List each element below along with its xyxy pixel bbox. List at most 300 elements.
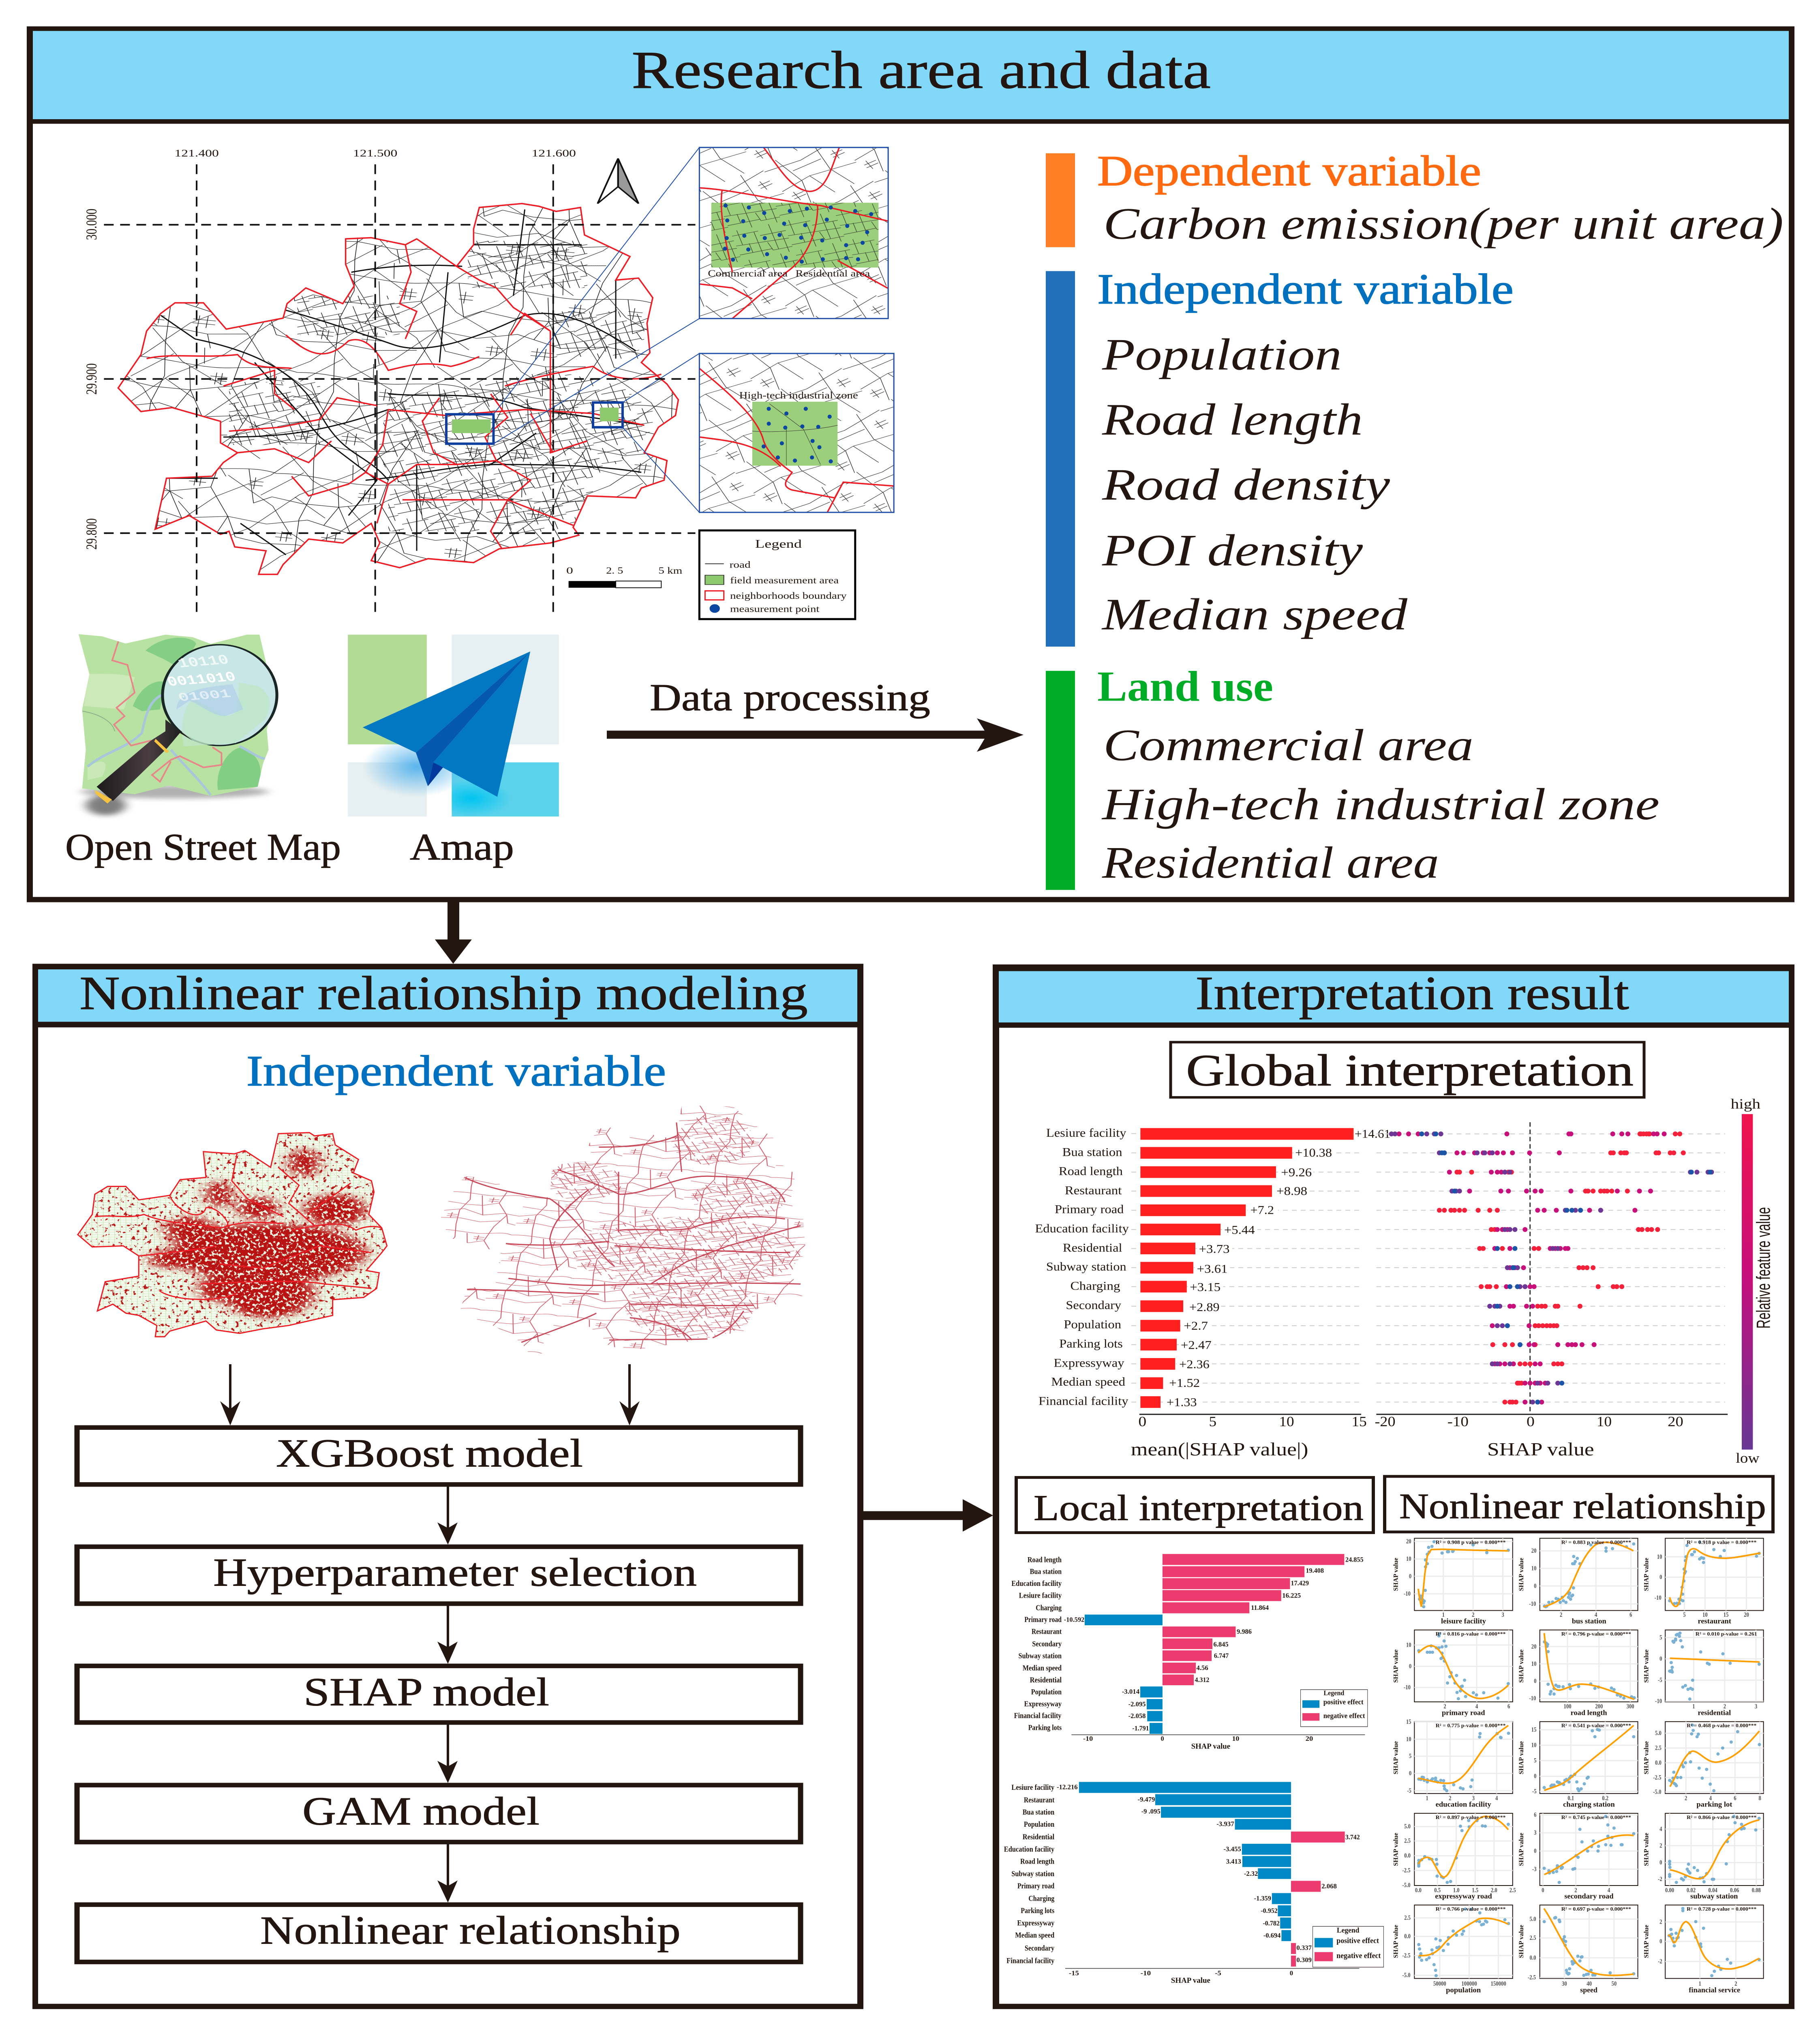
heading: modeling: Nonlinear relationship modeling: [79, 966, 808, 1020]
chart: population: -5.0: [1402, 1972, 1411, 1979]
header band: interpretation: [999, 971, 1789, 1022]
chart: road length: 100: [1563, 1703, 1572, 1710]
legend: effects sample one: negative effect: [1323, 1712, 1365, 1720]
chart: local interpretation sample two: Lesiure facility: [1011, 1783, 1055, 1791]
chart: local interpretation sample one: Secondary: [1032, 1640, 1062, 1648]
chart: financial service: R² = 0.728 p-value = 0.000***: [1687, 1907, 1757, 1912]
chart: local interpretation sample one: Primary road: [1024, 1616, 1062, 1624]
independent variable group: Population: [1102, 329, 1342, 379]
chart: mean SHAP value bars: Education facility: [1035, 1222, 1129, 1235]
chart: mean SHAP value bars: Parking lots: [1059, 1337, 1123, 1350]
chart: education facility: [1392, 1718, 1513, 1808]
arrow: left map to XGBoost: [220, 1364, 240, 1425]
chart: residential: -5: [1658, 1677, 1662, 1684]
chart: expressway road: 2.5: [1404, 1838, 1411, 1845]
chart: local interpretation sample one: 19.408: [1306, 1567, 1324, 1575]
independent variable group: [1046, 265, 1514, 647]
chart: leisure facility: 3: [1501, 1611, 1504, 1618]
small multiples: nonlinear relationship charts: [1392, 1538, 1764, 1994]
chart: local interpretation sample two: 0: [1290, 1969, 1293, 1977]
coordinate labels: 30.000: [84, 209, 100, 240]
chart: subway station: 0.04: [1708, 1887, 1717, 1894]
independent variable group: Road length: [1102, 394, 1363, 444]
chart: leisure facility: 0: [1409, 1573, 1411, 1580]
chart: primary road: 4: [1475, 1703, 1478, 1710]
chart: speed: 30: [1562, 1980, 1567, 1987]
chart: local interpretation sample two: 2.068: [1321, 1883, 1337, 1890]
colour bar legend: [1731, 1096, 1775, 1466]
arrow: data processing: [607, 718, 1023, 752]
chart: mean SHAP value bars: +9.26: [1281, 1166, 1312, 1179]
chart: parking lot: parking lot: [1696, 1800, 1732, 1808]
chart: local interpretation sample two: -5: [1215, 1969, 1221, 1977]
map legend: Legend: [755, 537, 802, 550]
chart: subway station: 4: [1659, 1826, 1662, 1833]
chart: SHAP value beeswarm: [1375, 1122, 1728, 1459]
chart: mean SHAP value bars: Charging: [1071, 1279, 1120, 1293]
title: Research area and data: [632, 40, 1211, 100]
chart: restaurant: 10: [1702, 1611, 1708, 1618]
chart: financial service: SHAP value: [1642, 1925, 1650, 1958]
icon: Open Street Map logo: 0011010: [165, 669, 238, 690]
chart: local interpretation sample one: -2.095: [1128, 1701, 1146, 1708]
chart: charging station: 5: [1534, 1757, 1536, 1764]
chart: financial service: 2: [1659, 1918, 1662, 1926]
chart: speed: 5.0: [1530, 1916, 1536, 1923]
arrow: research to modeling: [435, 902, 472, 964]
box: local interpretation: Local interpretation: [1034, 1488, 1364, 1528]
chart: primary road: 2: [1443, 1703, 1446, 1710]
chart: local interpretation sample one: Bua station: [1030, 1567, 1062, 1576]
chart: road length: -10: [1529, 1695, 1536, 1702]
chart: secondary road: 0: [1534, 1847, 1536, 1855]
chart: local interpretation sample two: Road length: [1020, 1857, 1055, 1866]
chart: residential: 0: [1659, 1655, 1662, 1663]
chart: population: 50000: [1433, 1980, 1446, 1987]
chart: mean SHAP value bars: Median speed: [1051, 1376, 1125, 1388]
chart: mean SHAP value bars: +2.36: [1179, 1358, 1210, 1371]
box: GAM model: GAM model: [302, 1789, 540, 1834]
chart: mean SHAP value bars: +3.61: [1197, 1262, 1228, 1275]
chart: local interpretation sample one: Charging: [1036, 1603, 1062, 1612]
chart: road length: R² = 0.796 p-value = 0.000***: [1561, 1632, 1631, 1637]
chart: residential: SHAP value: [1642, 1650, 1650, 1683]
chart: restaurant: 15: [1724, 1611, 1728, 1618]
chart: charging station: charging station: [1563, 1800, 1615, 1808]
variable list: [1046, 147, 1784, 890]
scale bar: 5 km: [658, 566, 683, 576]
inset: commercial and residential measurement area: [699, 148, 889, 319]
road network: [109, 198, 690, 578]
land use group: Commercial area: [1103, 720, 1473, 770]
arrow: modeling to interpretation: [863, 1499, 993, 1532]
chart: local interpretation sample two: Education facility: [1004, 1845, 1055, 1853]
chart: speed: SHAP value: [1518, 1925, 1525, 1958]
chart: local interpretation sample two: -0.694: [1263, 1932, 1281, 1939]
panel: research area and data: [27, 26, 1794, 902]
chart: mean SHAP value bars: +3.15: [1190, 1281, 1220, 1294]
chart: speed: 50: [1611, 1980, 1617, 1987]
chart: mean SHAP value bars: +1.33: [1167, 1396, 1197, 1409]
chart: financial service: [1642, 1905, 1764, 1994]
scale bar: 0: [566, 566, 573, 576]
chart: leisure facility: R² = 0.908 p value = 0.000***: [1436, 1540, 1506, 1545]
icon: Amap logo: [348, 634, 559, 817]
chart: mean SHAP value bars: 15: [1351, 1414, 1367, 1429]
chart: parking lot: 5.0: [1655, 1730, 1662, 1737]
chart: local interpretation sample one: 4.312: [1195, 1676, 1210, 1684]
chart: parking lot: 4: [1709, 1795, 1712, 1802]
icon: Open Street Map logo: 10110: [176, 652, 231, 671]
chart: local interpretation sample one: -3.014: [1122, 1688, 1139, 1695]
chart: expressway road: 5.0: [1404, 1823, 1411, 1830]
chart: local interpretation sample one: SHAP value: [1191, 1742, 1230, 1751]
chart: local interpretation sample two: Primary road: [1017, 1882, 1055, 1890]
chart: residential: 3: [1755, 1703, 1757, 1710]
chart: mean SHAP value bars: Subway station: [1046, 1260, 1126, 1273]
box: GAM model: [77, 1785, 801, 1842]
chart: mean SHAP value bars: Population: [1064, 1318, 1121, 1331]
chart: local interpretation sample one: 20: [1306, 1735, 1313, 1742]
chart: bus station: [1518, 1538, 1638, 1625]
chart: restaurant: R² = 0.918 p value = 0.000***: [1687, 1540, 1757, 1545]
chart: subway station: 0.02: [1687, 1887, 1696, 1894]
chart: local interpretation sample two: -0.782: [1263, 1920, 1280, 1927]
box: hyperparameter selection: [77, 1547, 801, 1604]
chart: subway station: SHAP value: [1642, 1833, 1650, 1866]
chart: mean SHAP value bars: Restaurant: [1065, 1184, 1122, 1197]
chart: local interpretation sample two: -3.455: [1223, 1845, 1241, 1853]
chart: education facility: 10: [1406, 1736, 1411, 1743]
chart: local interpretation sample one: Road length: [1028, 1556, 1062, 1564]
chart: subway station: 2: [1659, 1842, 1662, 1849]
coordinate labels: 121.500: [353, 147, 397, 159]
chart: restaurant: 5: [1683, 1611, 1686, 1618]
chart: mean SHAP value bars: +8.98: [1276, 1185, 1307, 1198]
chart: education facility: 5: [1409, 1753, 1411, 1760]
chart: population: R² = 0.766 p-value = 0.000***: [1436, 1907, 1506, 1912]
chart: parking lot: [1642, 1722, 1764, 1808]
chart: local interpretation sample one: 4.56: [1196, 1665, 1208, 1672]
chart: local interpretation sample two: -9.479: [1138, 1796, 1155, 1804]
chart: road length: 200: [1595, 1703, 1603, 1710]
chart: mean SHAP value bars: +14.61: [1355, 1127, 1390, 1140]
independent variable group: Road density: [1102, 459, 1390, 510]
chart: local interpretation sample two: 0.309: [1296, 1956, 1312, 1964]
chart: expressway road: -5.0: [1402, 1882, 1411, 1889]
chart: charging station: 15: [1531, 1726, 1536, 1733]
chart: parking lot: SHAP value: [1642, 1741, 1650, 1774]
chart: residential: [1642, 1630, 1764, 1717]
scale bar: [566, 566, 683, 588]
chart: secondary road: [1518, 1811, 1638, 1900]
header band: modeling: [38, 969, 857, 1022]
icon: Open Street Map logo: [77, 634, 279, 815]
chart: mean SHAP value bars: Primary road: [1055, 1203, 1124, 1216]
chart: local interpretation sample one: 17.429: [1291, 1579, 1309, 1587]
chart: SHAP value beeswarm: SHAP value: [1487, 1439, 1594, 1459]
chart: bus station: R² = 0.883 p value = 0.000***: [1561, 1540, 1631, 1545]
chart: residential: R² = 0.010 p-value = 0.261: [1696, 1632, 1757, 1637]
coordinate labels: 29.800: [84, 518, 100, 550]
chart: local interpretation sample two: Parking lots: [1021, 1907, 1055, 1915]
chart: mean SHAP value bars: mean(|SHAP value|): [1131, 1439, 1308, 1459]
inset: commercial and residential measurement area: Residential area: [795, 268, 870, 279]
data sources: logos: [77, 634, 559, 817]
inset: high-tech industrial zone: High-tech industrial zone: [739, 390, 858, 401]
box: XGBoost model: [77, 1427, 801, 1485]
chart: bus station: 6: [1629, 1611, 1632, 1618]
chart: local interpretation sample one: -2.058: [1128, 1712, 1146, 1720]
chart: local interpretation sample two: Financial facility: [1006, 1956, 1055, 1965]
chart: speed: -2.5: [1528, 1974, 1536, 1981]
chart: local interpretation sample one: Financial facility: [1014, 1712, 1062, 1720]
chart: secondary road: SHAP value: [1518, 1833, 1525, 1866]
chart: bus station: SHAP value: [1518, 1558, 1525, 1591]
box: global interpretation: Global interpretation: [1186, 1045, 1634, 1095]
chart: expressway road: 1.0: [1453, 1887, 1460, 1894]
coordinate labels: [84, 147, 576, 550]
chart: local interpretation sample one: 0: [1161, 1735, 1164, 1742]
chart: charging station: SHAP value: [1518, 1741, 1525, 1774]
label: Open Street Map: Open Street Map: [65, 826, 341, 868]
chart: mean SHAP value bars: 5: [1209, 1414, 1216, 1429]
chart: bus station: 4: [1595, 1611, 1597, 1618]
panel: nonlinear relationship modeling: [32, 964, 863, 2009]
chart: mean SHAP value bars: +2.47: [1181, 1339, 1212, 1352]
chart: bus station: 2: [1560, 1611, 1562, 1618]
chart: primary road: primary road: [1442, 1708, 1485, 1717]
chart: charging station: 0: [1534, 1773, 1536, 1780]
box: local interpretation: [1016, 1477, 1373, 1533]
magnifier lens: [163, 645, 277, 746]
chart: primary road: SHAP value: [1392, 1650, 1399, 1683]
chart: expressway road: R² = 0.897 p-value = 0.000***: [1436, 1815, 1506, 1820]
chart: secondary road: 6: [1534, 1811, 1536, 1819]
chart: expressway road: 0.0: [1415, 1887, 1422, 1894]
chart: charging station: -5: [1532, 1788, 1537, 1795]
chart: primary road: [1392, 1630, 1513, 1717]
chart: speed: R² = 0.697 p-value = 0.000***: [1561, 1907, 1631, 1912]
chart: financial service: 2: [1734, 1980, 1737, 1987]
chart: parking lot: 2.5: [1655, 1744, 1662, 1752]
chart: mean SHAP value bars: +2.89: [1189, 1301, 1220, 1314]
chart: leisure facility: 1: [1442, 1611, 1445, 1618]
chart: local interpretation sample one: 10: [1232, 1735, 1240, 1742]
chart: restaurant: SHAP value: [1642, 1558, 1650, 1591]
chart: subway station: [1642, 1813, 1764, 1900]
chart: mean SHAP value bars: +3.73: [1199, 1243, 1230, 1256]
chart: road length: 0: [1534, 1678, 1536, 1685]
chart: residential: residential: [1698, 1708, 1731, 1717]
chart: local interpretation sample two: -1.359: [1254, 1895, 1271, 1903]
chart: SHAP value beeswarm: -20: [1375, 1414, 1396, 1429]
chart: charging station: 10: [1531, 1742, 1536, 1749]
chart: residential: 2: [1724, 1703, 1726, 1710]
chart: local interpretation sample one: -10.592: [1064, 1616, 1084, 1624]
chart: local interpretation sample two: Population: [1024, 1820, 1055, 1829]
chart: local interpretation sample one: Median speed: [1023, 1664, 1062, 1672]
chart: population: 100000: [1461, 1980, 1477, 1987]
heading: interpretation result: Interpretation result: [1195, 966, 1629, 1020]
icon: north arrow: [597, 159, 638, 204]
label: Amap: Amap: [410, 826, 514, 868]
chart: speed: 2.5: [1530, 1935, 1536, 1941]
dependent variable group: Dependent variable: [1097, 147, 1481, 195]
chart: local interpretation sample one: Residential: [1030, 1676, 1062, 1684]
legend: effects sample one: positive effect: [1323, 1698, 1364, 1706]
chart: speed: 0.0: [1530, 1954, 1536, 1961]
chart: parking lot: 8: [1758, 1795, 1761, 1802]
chart: subway station: R² = 0.866 p-value = 0.000***: [1687, 1815, 1757, 1820]
chart: local interpretation sample two: -2.32: [1244, 1870, 1258, 1877]
chart: expressway road: [1392, 1813, 1516, 1900]
chart: secondary road: 3: [1534, 1829, 1536, 1836]
chart: parking lot: R² = 0.468 p-value = 0.000***: [1687, 1723, 1757, 1729]
colour bar legend: high: [1731, 1096, 1760, 1112]
chart: mean SHAP value bars: +1.52: [1169, 1377, 1200, 1390]
chart: road length: SHAP value: [1518, 1650, 1525, 1683]
chart: local interpretation sample two: -0.952: [1261, 1907, 1278, 1915]
box: nonlinear relationship: Nonlinear relationship: [260, 1908, 681, 1953]
chart: bus station: bus station: [1572, 1617, 1606, 1625]
chart: local interpretation sample two: [1004, 1782, 1383, 1985]
chart: primary road: R² = 0.816 p-value = 0.000***: [1436, 1632, 1506, 1637]
chart: local interpretation sample one: Parking lots: [1028, 1723, 1062, 1732]
chart: local interpretation sample two: Secondary: [1025, 1944, 1055, 1952]
neighborhood boundaries: [118, 204, 678, 574]
chart: education facility: 15: [1406, 1718, 1411, 1726]
chart: SHAP value beeswarm: 10: [1597, 1414, 1612, 1429]
chart: charging station: 0.2: [1602, 1795, 1608, 1802]
chart: local interpretation sample one: 24.855: [1345, 1556, 1364, 1564]
chart: local interpretation sample two: Bua station: [1023, 1808, 1055, 1816]
chart: parking lot: 2: [1685, 1795, 1687, 1802]
box: SHAP model: SHAP model: [304, 1670, 549, 1714]
chart: mean SHAP value bars: [1035, 1127, 1392, 1459]
box: nonlinear relationship: Nonlinear relationship: [1399, 1486, 1766, 1526]
chart: local interpretation sample two: Median speed: [1015, 1931, 1055, 1939]
box: nonlinear relationship: [1385, 1476, 1773, 1532]
chart: local interpretation sample two: -12.216: [1057, 1783, 1078, 1791]
chart: local interpretation sample one: 6.747: [1214, 1652, 1229, 1660]
legend: effects sample two: negative effect: [1336, 1952, 1381, 1960]
chart: mean SHAP value bars: Lesiure facility: [1046, 1127, 1126, 1140]
chart: education facility: education facility: [1436, 1800, 1491, 1808]
chart: local interpretation sample two: -15: [1069, 1969, 1079, 1977]
chart: mean SHAP value bars: 0: [1138, 1414, 1146, 1429]
chart: road length: [1518, 1630, 1638, 1717]
chart: secondary road: 4: [1608, 1887, 1610, 1894]
chart: population: -2.5: [1402, 1952, 1411, 1959]
chart: parking lot: 0.0: [1655, 1759, 1662, 1766]
chart: education facility: -5: [1407, 1787, 1411, 1794]
chart: leisure facility: 2: [1472, 1611, 1474, 1618]
chart: local interpretation sample one: -1.791: [1132, 1725, 1149, 1732]
chart: local interpretation sample two: Subway station: [1011, 1869, 1055, 1878]
chart: leisure facility: 10: [1406, 1556, 1411, 1563]
chart: education facility: 1: [1426, 1795, 1428, 1802]
chart: restaurant: 10: [1657, 1553, 1662, 1560]
chart: leisure facility: -10: [1404, 1590, 1411, 1598]
chart: parking lot: -5.0: [1653, 1789, 1662, 1796]
chart: local interpretation sample two: Charging: [1028, 1894, 1055, 1903]
chart: SHAP value beeswarm: 0: [1527, 1414, 1535, 1429]
chart: education facility: 2: [1449, 1795, 1452, 1802]
arrow: hyperparameter to SHAP: [437, 1606, 458, 1664]
chart: primary road: 6: [1507, 1703, 1510, 1710]
chart: local interpretation sample two: -9 .095: [1141, 1808, 1161, 1815]
chart: education facility: SHAP value: [1392, 1741, 1399, 1774]
chart: speed: [1518, 1905, 1638, 1994]
chart: local interpretation sample two: Expressyway: [1017, 1919, 1055, 1927]
chart: bus station: -10: [1529, 1601, 1536, 1607]
arrow: XGBoost to hyperparameter: [437, 1487, 458, 1545]
header band: research area: [33, 31, 1789, 119]
chart: secondary road: R² = 0.745 p-value = 0.000***: [1561, 1815, 1631, 1820]
magnifier handle: [96, 720, 193, 801]
sub-heading: independent variable: Independent variable: [246, 1047, 666, 1095]
inset: commercial and residential measurement area: Commercial area: [708, 268, 788, 279]
chart: local interpretation sample two: 3.742: [1345, 1834, 1360, 1841]
chart: education facility: 0: [1409, 1770, 1411, 1777]
chart: population: SHAP value: [1392, 1925, 1399, 1958]
chart: local interpretation sample one: Education facility: [1011, 1579, 1062, 1588]
chart: local interpretation sample one: 6.845: [1214, 1641, 1229, 1648]
box: hyperparameter selection: Hyperparameter selection: [213, 1550, 697, 1595]
chart: local interpretation sample two: -3.937: [1216, 1820, 1234, 1828]
chart: bus station: 0: [1534, 1583, 1536, 1590]
chart: expressway road: expressyway road: [1435, 1892, 1492, 1900]
legend: effects sample two: Legend: [1337, 1926, 1359, 1935]
map legend: [699, 530, 855, 619]
chart: subway station: 0.00: [1665, 1887, 1674, 1894]
chart: expressway road: SHAP value: [1392, 1833, 1399, 1866]
chart: education facility: 4: [1495, 1795, 1498, 1802]
chart: bus station: 20: [1531, 1547, 1536, 1554]
chart: primary road: 0: [1409, 1663, 1411, 1670]
chart: leisure facility: SHAP value: [1392, 1558, 1399, 1591]
arrow: GAM to nonlinear relationship: [437, 1844, 458, 1903]
chart: charging station: [1518, 1722, 1638, 1808]
chart: local interpretation sample one: Population: [1031, 1688, 1062, 1696]
inset: high-tech industrial zone: [699, 354, 895, 512]
chart: mean SHAP value bars: Road length: [1059, 1165, 1123, 1178]
chart: expressway road: 2.5: [1510, 1887, 1516, 1894]
chart: local interpretation sample one: 16.225: [1282, 1592, 1301, 1599]
chart: subway station: 0: [1659, 1859, 1662, 1866]
chart: expressway road: 0.0: [1404, 1852, 1411, 1859]
chart: leisure facility: 20: [1406, 1538, 1411, 1545]
chart: expressway road: 2.0: [1491, 1887, 1497, 1894]
independent variable group: POI density: [1102, 525, 1363, 575]
chart: local interpretation sample one: [1011, 1554, 1368, 1751]
chart: subway station: subway station: [1690, 1892, 1738, 1900]
coordinate labels: 29.900: [84, 363, 100, 394]
chart: subway station: -2: [1658, 1876, 1662, 1883]
chart: road length: 300: [1626, 1703, 1634, 1710]
chart: subway station: 0.06: [1730, 1887, 1739, 1894]
chart: mean SHAP value bars: +5.44: [1224, 1223, 1255, 1237]
dependent variable group: [1046, 147, 1784, 249]
chart: local interpretation sample one: 9.986: [1237, 1628, 1252, 1635]
legend: effects sample two: positive effect: [1336, 1936, 1379, 1945]
chart: local interpretation sample one: Expressyway: [1024, 1699, 1062, 1708]
chart: financial service: 1: [1698, 1980, 1701, 1987]
map legend: road: [730, 559, 751, 570]
chart: residential: 1: [1692, 1703, 1695, 1710]
chart: population: 2.5: [1404, 1914, 1411, 1922]
